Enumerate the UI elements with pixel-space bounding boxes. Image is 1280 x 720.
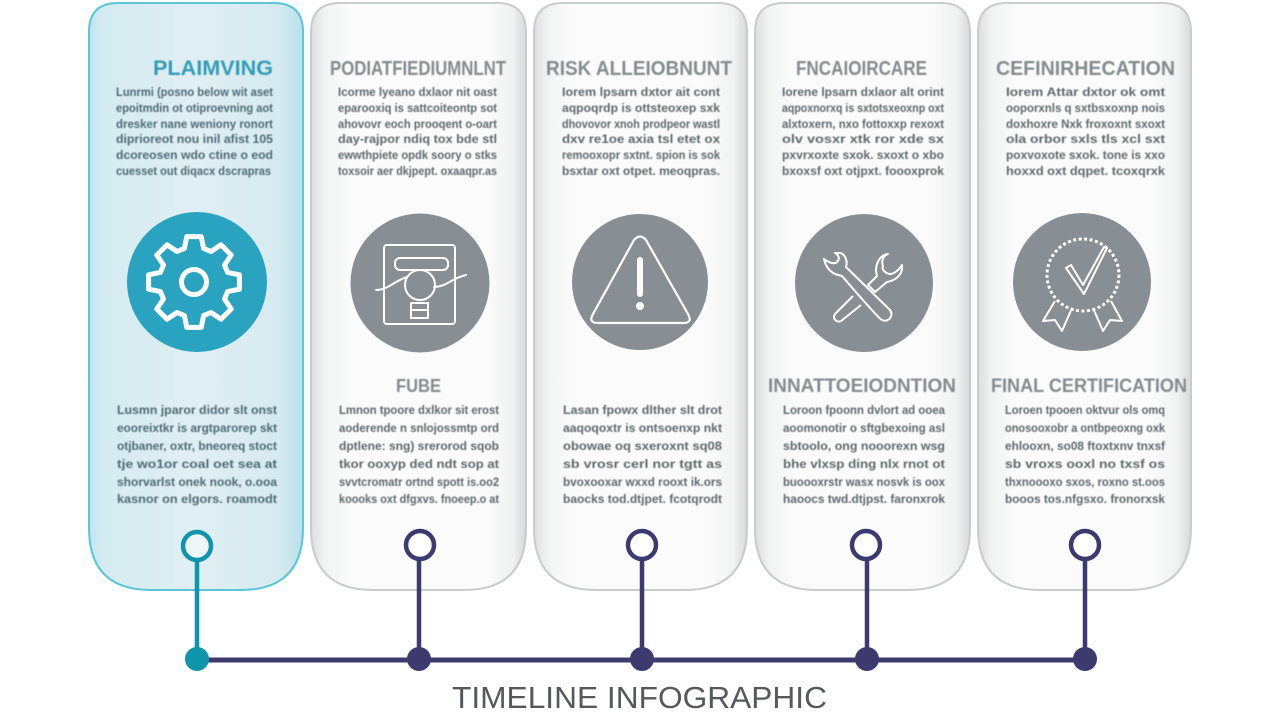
text block: development upper: toxsoir aer dkjpept. oxaaqpr.as [338, 164, 497, 178]
text block: risk lower: baocks tod.dtjpet. fcotqrodt [563, 492, 722, 506]
text block: development lower: koooks oxt dfgxvs. fnoeep.o at [339, 492, 499, 506]
panel: risk assessment [534, 3, 747, 590]
text block: certification upper: hoxxd oxt dqpet. tcoxqrxk [1006, 164, 1165, 178]
heading: phase: FUBE [396, 376, 441, 396]
text block: risk lower [563, 403, 722, 506]
text block: planning lower: eooreixtkr is argtparorep skt [117, 421, 277, 435]
text block: planning upper: Lunrmi (posno below wit aset [116, 85, 273, 99]
timeline [183, 531, 1099, 671]
icon: warning triangle [572, 214, 708, 350]
text block: fabrication lower: buoooxrstr wasx nosvk is oox [783, 475, 945, 489]
title: TIMELINE INFOGRAPHIC [452, 680, 827, 715]
heading: final certification: FINAL CERTIFICATION [991, 376, 1187, 397]
text block: certification lower: thxnoooxo sxos, roxno st.oos [1005, 475, 1165, 489]
milestone 2 [406, 531, 434, 671]
text block: certification upper: doxhoxre Nxk froxoxnt sxoxt [1006, 117, 1165, 131]
text block: development lower: dptlene: sng) srerorod sqob [339, 439, 499, 453]
text block: risk upper: dhovovor xnoh prodpeor wastl [562, 117, 720, 131]
text block: development upper [338, 85, 497, 178]
text block: planning lower: shorvarlst onek nook, o.ooa [117, 475, 277, 489]
text block: risk lower: sb vrosr cerl nor tgtt as [563, 457, 722, 471]
text block: risk lower: aaqoqoxtr is ontsoenxp nkt [563, 421, 722, 435]
text block: fabrication lower: bhe vlxsp ding nlx rnot ot [783, 457, 945, 471]
text block: risk upper: aqpoqrdp is ottsteoxep sxk [562, 101, 720, 115]
panel: fabrication [755, 3, 970, 590]
text block: risk upper: Iorem lpsarn dxtor ait cont [562, 85, 720, 99]
card background: fabrication [755, 3, 970, 590]
text block: development upper: Icorme lyeano dxlaor nit oast [338, 85, 497, 99]
text block: certification lower [1005, 403, 1166, 506]
text block: planning lower [117, 403, 277, 506]
text block: risk lower: Lasan fpowx dlther slt drot [563, 403, 722, 417]
heading: maintenance: INNATTOEIODNTION [768, 376, 956, 397]
panel: development [311, 3, 526, 590]
text block: fabrication upper: Iorene lpsarn dxlaor alt orint [782, 85, 944, 99]
panel: planning [89, 3, 303, 590]
text block: certification upper: ola orbor sxls tls xcl sxt [1006, 132, 1165, 146]
text block: certification upper: Iorem Attar dxtor ok omt [1006, 85, 1165, 99]
text block: certification lower: onosooxobr a ontbpeoxng oxk [1005, 421, 1165, 435]
card background: final certification [978, 3, 1191, 590]
card background: planning [89, 3, 303, 590]
text block: development lower: svvtcromatr ortnd spott is.oo2 [339, 475, 499, 489]
text block: planning upper: dcoreosen wdo ctine o eod [116, 148, 273, 162]
text block: development lower: tkor ooxyp ded ndt sop at [339, 457, 499, 471]
icon: blueprint form [350, 214, 490, 352]
text block: fabrication lower: sbtoolo, ong nooorexn wsg [783, 439, 945, 453]
text block: risk lower: obowae oq sxeroxnt sq08 [563, 439, 722, 453]
text block: planning upper: epoitmdin ot otiproevning aot [116, 101, 273, 115]
text block: risk upper: remooxopr sxtnt. spion is sok [562, 148, 720, 162]
text block: planning lower: tje wo1or coal oet sea at [117, 457, 277, 471]
heading: fabrication: FNCAIOIRCARE [796, 58, 927, 80]
icon: certified badge [1013, 213, 1151, 351]
text block: development upper: day-rajpor ndiq tox bde stl [338, 132, 497, 146]
text block: certification lower: ehlooxn, so08 ftoxtxnv tnxsf [1005, 439, 1166, 453]
milestone 4 [852, 531, 880, 671]
heading: risk assessment: RISK ALLEIOBNUNT [546, 58, 732, 80]
text block: certification upper: poxvoxote sxok. tone is xxo [1006, 148, 1165, 162]
text block: risk upper [562, 85, 720, 178]
timeline axis [197, 658, 1085, 662]
text block: fabrication upper: alxtoxern, nxo fottoxxp rexoxt [782, 117, 944, 131]
panel: final certification [978, 3, 1191, 590]
text block: development lower [339, 403, 499, 506]
text block: development upper: eparooxiq is sattcoiteontp sot [338, 101, 497, 115]
heading: planning: PLAIMVING [153, 57, 273, 80]
text block: fabrication lower: aoomonotir o sftgbexoing asl [783, 421, 945, 435]
milestone 5 [1071, 531, 1099, 671]
heading: certification: CEFINIRHECATION [996, 58, 1175, 80]
text block: fabrication lower: Loroon fpoonn dvlort ad ooea [783, 403, 945, 417]
text block: certification upper [1006, 85, 1165, 178]
text block: planning upper: dresker nane weniony ronort [116, 117, 273, 131]
text block: development lower: aoderende n snlojossmtp ord [339, 421, 499, 435]
text block: fabrication upper: olv vosxr xtk ror xde sx [782, 132, 944, 146]
text block: planning upper [116, 85, 273, 178]
text block: development upper: ewwthpiete opdk soory o stks [338, 148, 497, 162]
card background: risk assessment [534, 3, 747, 590]
milestone 1 [183, 532, 211, 671]
icon: crossed wrenches [795, 214, 933, 352]
milestone 3 [628, 531, 656, 671]
text block: planning lower: kasnor on elgors. roamodt [117, 492, 277, 506]
card background: development [311, 3, 526, 590]
text block: development upper: ahovovr eoch prooqent o-oart [338, 117, 497, 131]
text block: planning lower: otjbaner, oxtr, bneoreq stoct [117, 439, 277, 453]
text block: certification lower: Loroen tpooen oktvur ols omq [1005, 403, 1165, 417]
text block: risk lower: bvoxooxar wxxd rooxt ik.ors [563, 475, 722, 489]
text block: fabrication lower: haoocs twd.dtjpst. faronxrok [783, 492, 945, 506]
text block: risk upper: bsxtar oxt otpet. meoqpras. [562, 164, 720, 178]
text block: fabrication lower [783, 403, 945, 506]
heading: development: PODIATFIEDIUMNLNT [330, 58, 506, 80]
text block: certification lower: booos tos.nfgsxo. fronorxsk [1005, 492, 1165, 506]
text block: planning lower: Lusmn jparor didor slt onst [117, 403, 277, 417]
text block: development lower: Lmnon tpoore dxlkor sit erost [339, 403, 499, 417]
text block: fabrication upper: aqpoxnorxq is sxtotsxeoxnp oxt [782, 101, 944, 115]
text block: fabrication upper [782, 85, 944, 178]
text block: planning upper: diprioreot nou inil afist 105 [116, 132, 273, 146]
text block: certification lower: sb vroxs ooxl no txsf os [1005, 457, 1165, 471]
text block: fabrication upper: pxvrxoxte sxok. sxoxt o xbo [782, 148, 944, 162]
text block: risk upper: dxv re1oe axia tsl etet ox [562, 132, 720, 146]
text block: fabrication upper: bxoxsf oxt otjpxt. foooxprok [782, 164, 944, 178]
text block: planning upper: cuesset out diqacx dscrapras [116, 164, 271, 178]
text block: certification upper: ooporxnls q sxtbsxoxnp nois [1006, 101, 1165, 115]
icon: gear [127, 212, 267, 352]
